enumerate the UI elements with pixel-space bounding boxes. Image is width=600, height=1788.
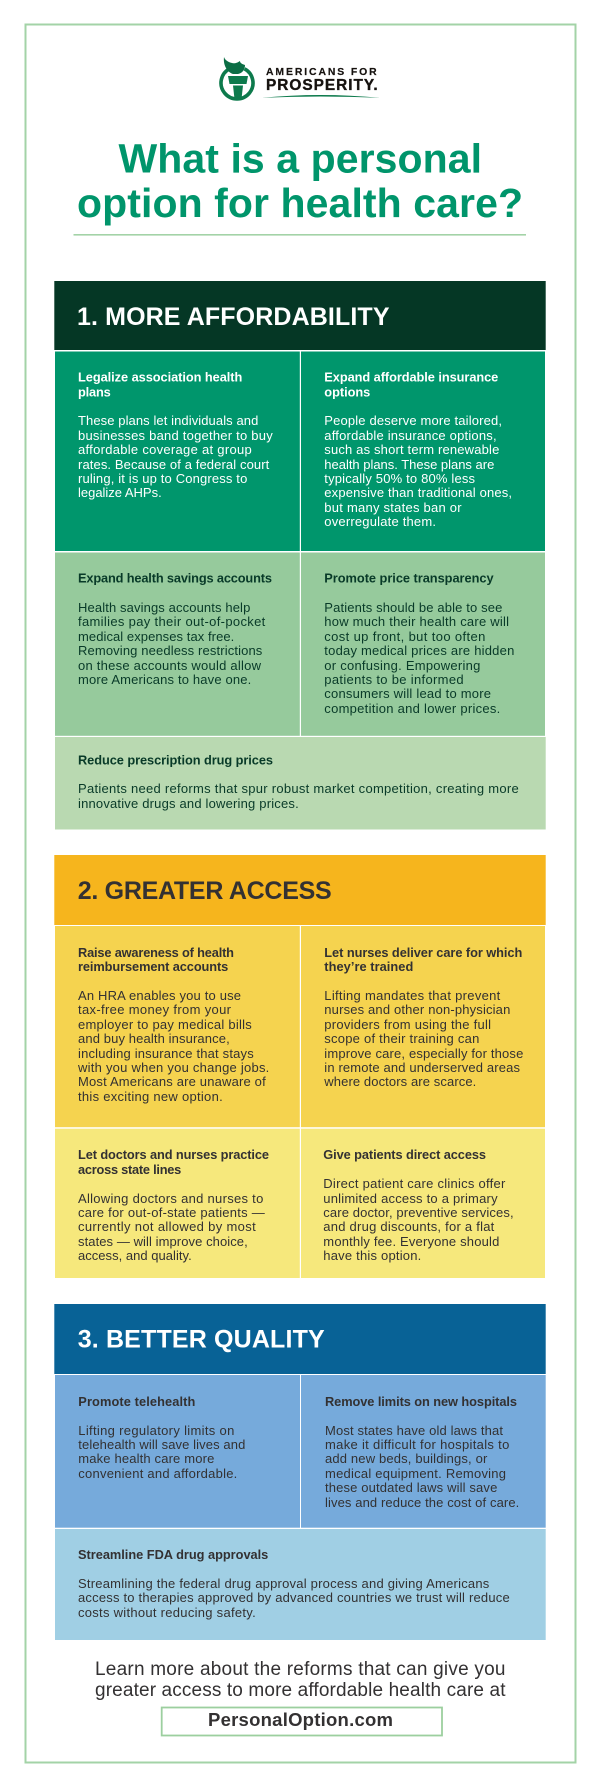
panel: legalize association health plans: Legalize association health (78, 370, 242, 385)
heading: 2. Greater access: 2. GREATER ACCESS (78, 877, 332, 905)
panel: legalize association health plans: These plans let individuals and (78, 413, 258, 428)
panel: legalize association health plans: affordable coverage at group (78, 442, 252, 457)
panel: legalize association health plans (55, 352, 300, 551)
text block: learn more: greater access to more affordable health care at (95, 1680, 506, 1701)
panel: give patients direct access: monthly fee. Everyone should (323, 1234, 499, 1249)
panel: let doctors and nurses practice across state lines: states — will improve choice, (78, 1234, 248, 1249)
panel: promote price transparency: patients to be informed (324, 672, 464, 687)
panel: streamline FDA drug approvals (55, 1529, 546, 1640)
panel: raise awareness of health reimbursement accounts: Raise awareness of health (78, 945, 234, 960)
panel: let doctors and nurses practice across state lines: Let doctors and nurses practice (78, 1147, 269, 1162)
panel: raise awareness of health reimbursement accounts: reimbursement accounts (78, 959, 228, 974)
wordmark: AMERICANS FOR (266, 67, 377, 78)
panel: legalize association health plans: legalize AHPs. (78, 485, 162, 500)
panel: remove limits on new hospitals: medical equipment. Removing (325, 1466, 506, 1481)
panel: remove limits on new hospitals (301, 1375, 546, 1528)
panel: promote price transparency: consumers will lead to more (324, 686, 491, 701)
panel: legalize association health plans: ruling, it is up to Congress to (78, 471, 247, 486)
panel: let nurses deliver care: improve care, especially for those (324, 1046, 523, 1061)
panel: expand affordable insurance options: affordable insurance options, (324, 428, 497, 443)
panel: raise awareness of health reimbursement accounts: tax-free money from your (78, 1002, 232, 1017)
panel: expand affordable insurance options: options (324, 385, 370, 400)
panel: promote telehealth: telehealth will save lives and (78, 1437, 245, 1452)
swoosh (262, 95, 380, 98)
panel: raise awareness of health reimbursement accounts: An HRA enables you to use (78, 988, 241, 1003)
panel: promote price transparency: competition and lower prices. (324, 701, 500, 716)
panel: let nurses deliver care: scope of their training can (324, 1031, 479, 1046)
panel: legalize association health plans: businesses band together to buy (78, 428, 273, 443)
panel: promote price transparency (301, 552, 545, 736)
panel: expand health savings accounts (55, 552, 300, 736)
footer call to action (95, 1659, 506, 1736)
panel: let doctors and nurses practice across state lines: care for out-of-state patients — (78, 1205, 265, 1220)
panel: remove limits on new hospitals: lives and reduce the cost of care. (325, 1495, 519, 1510)
text block: learn more (95, 1659, 506, 1701)
panel: expand affordable insurance options (301, 352, 545, 551)
panel: raise awareness of health reimbursement accounts: with you when you change jobs. (77, 1060, 269, 1075)
logo: Americans for Prosperity (221, 57, 380, 99)
panel: promote price transparency: today medical prices are hidden (324, 643, 514, 658)
panel: expand affordable insurance options: overregulate them. (324, 514, 436, 529)
panel: expand health savings accounts: Removing needless restrictions (78, 643, 263, 658)
panel: expand health savings accounts: medical expenses tax free. (78, 629, 234, 644)
section 3: better quality (54, 1304, 546, 1640)
panel: reduce prescription drug prices: Patients need reforms that spur robust market competition, creating more (78, 781, 519, 796)
panel: remove limits on new hospitals: Remove limits on new hospitals (325, 1394, 517, 1409)
heading: 1. More affordability: 1. MORE AFFORDABILITY (77, 303, 390, 331)
panel: reduce prescription drug prices (55, 737, 546, 830)
panel: let nurses deliver care: in remote and underserved areas (324, 1060, 520, 1075)
panel: give patients direct access (301, 1129, 545, 1278)
panel: legalize association health plans: rates. Because of a federal court (78, 457, 270, 472)
icon: torch (221, 57, 253, 99)
section 2: greater access (54, 855, 546, 1278)
panel: give patients direct access: Direct patient care clinics offer (323, 1176, 506, 1191)
panel: remove limits on new hospitals: make it difficult for hospitals to (325, 1437, 509, 1452)
title: option for health care? (77, 180, 523, 226)
panel: expand health savings accounts: Health savings accounts help (78, 600, 250, 615)
text block: learn more: Learn more about the reforms that can give you (95, 1659, 506, 1680)
wordmark: PROSPERITY. (266, 77, 378, 94)
panel: promote price transparency: Promote price transparency (324, 571, 494, 586)
panel: give patients direct access: care doctor, preventive services, (323, 1205, 514, 1220)
panel: streamline FDA drug approvals: access to therapies approved by advanced countries we trust will reduce (78, 1590, 510, 1605)
panel: reduce prescription drug prices: innovative drugs and lowering prices. (78, 796, 299, 811)
panel: expand affordable insurance options: but many states ban or (324, 500, 462, 515)
panel: promote telehealth: Promote telehealth (78, 1394, 195, 1409)
panel: let nurses deliver care: providers from using the full (324, 1017, 491, 1032)
heading: 2. Greater access (54, 855, 546, 925)
panel: promote telehealth: Lifting regulatory limits on (78, 1423, 234, 1438)
panel: let nurses deliver care: where doctors are scarce. (323, 1074, 476, 1089)
panel: expand affordable insurance options: People deserve more tailored, (324, 413, 502, 428)
panel: promote price transparency: Patients should be able to see (324, 600, 502, 615)
panel: expand affordable insurance options: Expand affordable insurance (324, 370, 498, 385)
panel: streamline FDA drug approvals: costs without reducing safety. (78, 1605, 256, 1620)
panel: let doctors and nurses practice across state lines: currently not allowed by most (78, 1219, 256, 1234)
panel: legalize association health plans: plans (78, 385, 111, 400)
panel: promote price transparency: cost up front, but too often (324, 629, 485, 644)
panel: let doctors and nurses practice across state lines: access, and quality. (78, 1248, 192, 1263)
panel: raise awareness of health reimbursement accounts: and buy health insurance, (78, 1031, 230, 1046)
panel: let doctors and nurses practice across state lines: across state lines (78, 1162, 181, 1177)
panel: raise awareness of health reimbursement accounts: including insurance that stays (78, 1046, 254, 1061)
panel: remove limits on new hospitals: these outdated laws will save (325, 1480, 497, 1495)
panel: expand health savings accounts: on these accounts would allow (78, 658, 262, 673)
panel: let doctors and nurses practice across state lines: Allowing doctors and nurses to (78, 1191, 263, 1206)
panel: give patients direct access: Give patients direct access (323, 1147, 486, 1162)
panel: let nurses deliver care: Let nurses deliver care for which (324, 945, 522, 960)
panel: let nurses deliver care: nurses and other non-physician (324, 1002, 510, 1017)
panel: expand health savings accounts: Expand health savings accounts (78, 571, 272, 586)
panel: expand affordable insurance options: health plans. These plans are (324, 457, 494, 472)
title: What is a personal (118, 136, 482, 182)
panel: remove limits on new hospitals: add new beds, buildings, or (325, 1451, 488, 1466)
panel: promote price transparency: or confusing. Empowering (324, 658, 480, 673)
panel: let doctors and nurses practice across state lines (55, 1129, 300, 1278)
wordmark (266, 67, 378, 94)
panel: raise awareness of health reimbursement accounts: Most Americans are unaware of (78, 1074, 266, 1089)
panel: give patients direct access: have this option. (323, 1248, 421, 1263)
panel: give patients direct access: unlimited access to a primary (323, 1191, 498, 1206)
heading: 1. More affordability (54, 281, 546, 350)
panel: expand health savings accounts: more Americans to have one. (78, 672, 251, 687)
panel: let nurses deliver care: Lifting mandates that prevent (324, 988, 501, 1003)
panel: expand affordable insurance options: such as short term renewable (324, 442, 499, 457)
panel: streamline FDA drug approvals: Streamline FDA drug approvals (78, 1547, 268, 1562)
panel: raise awareness of health reimbursement accounts: employer to pay medical bills (78, 1017, 252, 1032)
heading: 3. Better quality (54, 1304, 546, 1374)
panel: reduce prescription drug prices: Reduce prescription drug prices (78, 753, 273, 768)
panel: raise awareness of health reimbursement accounts: this exciting new option. (78, 1089, 223, 1104)
link box: PersonalOption.com: PersonalOption.com (208, 1709, 393, 1730)
title (77, 136, 523, 226)
panel: remove limits on new hospitals: Most states have old laws that (325, 1423, 503, 1438)
panel: expand health savings accounts: families pay their out-of-pocket (78, 614, 266, 629)
section 1: more affordability (54, 281, 546, 830)
panel: expand affordable insurance options: typically 50% to 80% less (324, 471, 476, 486)
panel: promote price transparency: how much their health care will (324, 614, 509, 629)
link box: PersonalOption.com (162, 1708, 442, 1736)
panel: promote telehealth: convenient and affordable. (78, 1466, 237, 1481)
panel: give patients direct access: and drug discounts, for a flat (323, 1219, 495, 1234)
panel: streamline FDA drug approvals: Streamlining the federal drug approval process and giving Americans (78, 1576, 490, 1591)
panel: promote telehealth (55, 1375, 300, 1528)
panel: promote telehealth: make health care more (78, 1451, 214, 1466)
panel: let nurses deliver care (301, 926, 545, 1127)
panel: expand affordable insurance options: expensive than traditional ones, (324, 485, 512, 500)
heading: 3. Better quality: 3. BETTER QUALITY (78, 1326, 325, 1354)
panel: raise awareness of health reimbursement accounts (55, 926, 300, 1127)
panel: let nurses deliver care: they’re trained (324, 959, 413, 974)
